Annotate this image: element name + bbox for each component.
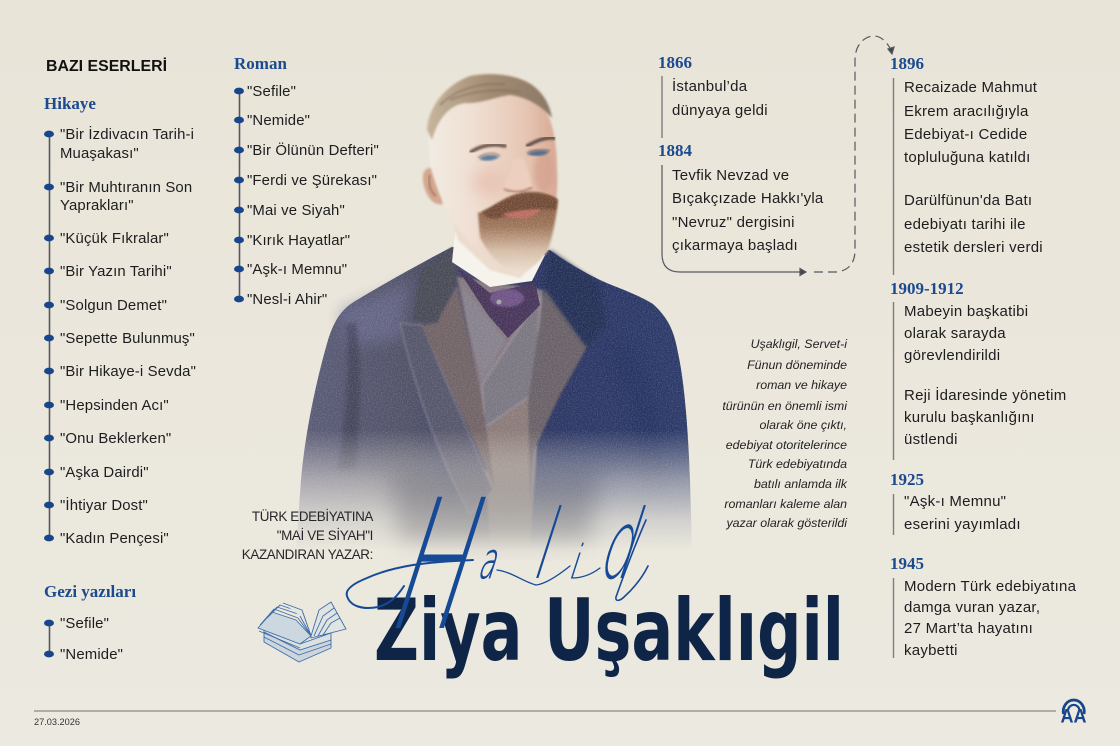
timeline: 1884: çıkarmaya başladı [672, 237, 798, 254]
face [430, 94, 558, 236]
timeline: 1896: Edebiyat-ı Cedide [904, 126, 1028, 143]
subtitle: KAZANDIRAN YAZAR: [242, 547, 373, 562]
list: hikaye: "İhtiyar Dost" [60, 496, 148, 514]
timeline: 1884: Tevfik Nevzad ve [672, 167, 789, 184]
timeline: 1884: 1884 [658, 141, 692, 160]
timeline: 1925: "Aşk-ı Memnu" [904, 493, 1006, 510]
timeline: 1925: eserini yayımladı [904, 516, 1021, 533]
beard [478, 192, 558, 274]
list: gezi yazıları: "Nemide" [60, 647, 123, 663]
timeline: 1909-1912: Reji İdaresinde yönetim [904, 386, 1066, 404]
italic summary text [722, 337, 848, 530]
list: roman: Roman [234, 54, 287, 73]
subtitle [242, 509, 373, 562]
timeline: 1896 [890, 54, 1043, 275]
timeline: 1909-1912 [890, 279, 1066, 460]
list: roman [234, 54, 379, 308]
list: hikaye: "Sepette Bulunmuş" [60, 331, 195, 347]
timeline: 1909-1912: görevlendirildi [904, 347, 1000, 364]
name: Halid script: a [473, 531, 508, 590]
list: hikaye: "Bir Yazın Tarihi" [60, 264, 172, 280]
timeline: 1945 [890, 554, 1077, 659]
timeline: 1945: 27 Mart’ta hayatını [904, 620, 1033, 637]
list: roman: "Nemide" [247, 113, 310, 129]
name: Halid script: i [565, 536, 589, 590]
list: hikaye: Yaprakları" [60, 198, 134, 214]
timeline: 1925: 1925 [890, 470, 924, 489]
brows [471, 145, 505, 152]
name: Halid script [347, 462, 666, 671]
beard texture [478, 192, 558, 268]
cheek colour [471, 168, 505, 196]
neck and pale jaw stubble [456, 227, 550, 278]
lips [502, 209, 540, 218]
list: hikaye: "Kadın Pençesi" [60, 531, 169, 547]
italic summary text: edebiyat otoritelerince [726, 438, 847, 452]
italic summary text: yazar olarak gösterildi [725, 516, 848, 530]
heading: bazı eserleri: BAZI ESERLERİ [46, 58, 167, 75]
lapels and waistcoat [400, 247, 587, 550]
list: hikaye: "Bir Hikaye-i Sevda" [60, 364, 196, 380]
portrait of Halid Ziya Uşaklıgil [296, 74, 696, 550]
list: roman: "Ferdi ve Şürekası" [247, 173, 377, 189]
list: roman: "Sefile" [247, 84, 296, 100]
list: hikaye: "Solgun Demet" [60, 298, 167, 314]
lower body fade shadow [390, 470, 600, 540]
timeline: 1884: Bıçakçızade Hakkı'yla [672, 190, 824, 207]
italic summary text: roman ve hikaye [756, 378, 847, 392]
name: Halid script: d [589, 489, 657, 601]
timeline: 1896: Darülfünun'da Batı [904, 192, 1032, 209]
timeline: 1896: edebiyatı tarihi ile [904, 216, 1026, 233]
timeline: 1896: Ekrem aracılığıyla [904, 103, 1029, 120]
hair [427, 74, 552, 140]
italic summary text: romanları kaleme alan [724, 497, 847, 511]
list: roman: "Bir Ölünün Defteri" [247, 141, 379, 159]
list: hikaye: "Onu Beklerken" [60, 431, 171, 447]
list: hikaye [44, 94, 196, 547]
eyes [479, 155, 499, 161]
timeline: 1866: İstanbul’da [672, 77, 748, 95]
timeline: 1945: kaybetti [904, 642, 958, 659]
list: gezi yazıları [44, 582, 136, 663]
italic summary text: Fünun döneminde [747, 358, 847, 372]
moustache [482, 194, 557, 219]
timeline: 1866: 1866 [658, 53, 692, 72]
italic summary text: türünün en önemli ismi [722, 399, 848, 413]
name: Halid script: l [523, 489, 573, 601]
subtitle: TÜRK EDEBİYATINA [252, 509, 373, 524]
nose [522, 160, 532, 189]
name: Halid script: H [370, 462, 509, 671]
name: Ziya Uşaklıgil: Ziya Uşaklıgil [374, 581, 844, 681]
timeline: 1945: damga vuran yazar, [904, 599, 1040, 616]
timeline: 1896: estetik dersleri verdi [904, 239, 1043, 256]
list: roman: "Mai ve Siyah" [247, 203, 345, 219]
italic summary text: batılı anlamda ilk [754, 477, 848, 491]
timeline connector arrow [662, 36, 894, 276]
italic summary text: olarak öne çıktı, [760, 418, 847, 432]
timeline: 1909-1912: Mabeyin başkatibi [904, 303, 1028, 320]
timeline: 1884: "Nevruz" dergisini [672, 214, 795, 231]
list: hikaye: "Bir İzdivacın Tarih-i [60, 125, 194, 143]
timeline: 1896: Recaizade Mahmut [904, 79, 1038, 96]
timeline: 1866 [658, 53, 768, 138]
timeline: 1909-1912: 1909-1912 [890, 279, 964, 298]
timeline: 1909-1912: olarak sarayda [904, 325, 1006, 342]
footer line [34, 710, 1056, 712]
collar [452, 233, 545, 287]
ear [423, 168, 444, 204]
timeline: 1884 [658, 141, 824, 254]
list: hikaye: Muaşakası" [60, 146, 139, 162]
icon: AA logo: AA [1060, 706, 1087, 728]
coat [296, 247, 692, 550]
heading: hikaye: Hikaye [44, 94, 96, 113]
list: roman: "Nesl-i Ahir" [247, 292, 327, 308]
list: hikaye: "Hepsinden Acı" [60, 398, 169, 414]
icon: stacked books [258, 602, 346, 662]
coat texture [300, 247, 690, 510]
list: gezi yazıları: "Sefile" [60, 616, 109, 632]
list: roman: "Aşk-ı Memnu" [247, 262, 347, 278]
timeline: 1896: 1896 [890, 54, 924, 73]
list: gezi yazıları: Gezi yazıları [44, 582, 136, 601]
list: hikaye: "Küçük Fıkralar" [60, 231, 169, 247]
list: hikaye: "Aşka Dairdi" [60, 465, 149, 481]
italic summary text: Türk edebiyatında [748, 457, 847, 471]
cravat [455, 265, 540, 338]
italic summary text: Uşaklıgil, Servet-i [751, 337, 848, 351]
subtitle: "MAİ VE SİYAH"I [277, 528, 373, 543]
timeline: 1909-1912: kurulu başkanlığını [904, 409, 1035, 426]
date: 27.03.2026 [34, 717, 80, 727]
timeline: 1909-1912: üstlendi [904, 431, 958, 448]
timeline: 1896: topluluğuna katıldı [904, 149, 1031, 166]
timeline: 1925 [890, 470, 1021, 535]
list: roman: "Kırık Hayatlar" [247, 233, 350, 249]
list: hikaye: "Bir Muhtıranın Son [60, 180, 192, 196]
timeline: 1945: Modern Türk edebiyatına [904, 578, 1077, 595]
timeline: 1945: 1945 [890, 554, 924, 573]
timeline: 1866: dünyaya geldi [672, 102, 768, 119]
